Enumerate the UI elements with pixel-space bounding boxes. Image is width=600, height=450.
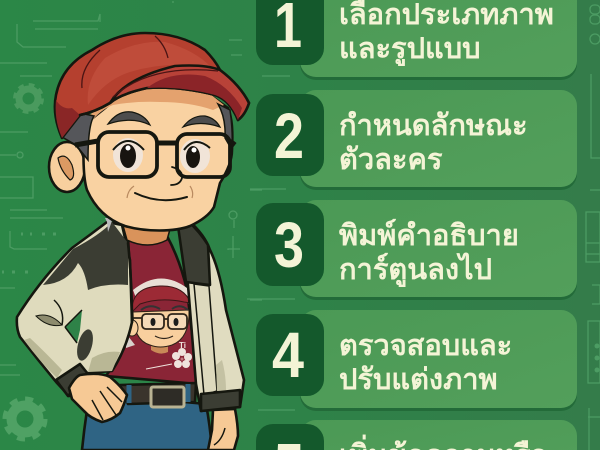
cartoon character <box>17 33 249 450</box>
mini character on shirt <box>125 278 192 369</box>
forehead shade <box>88 86 224 123</box>
card 4 <box>300 310 577 411</box>
smile creases <box>127 186 193 198</box>
right eye <box>180 139 210 173</box>
head <box>83 88 232 230</box>
right hand <box>208 409 238 450</box>
card 5 <box>300 420 577 450</box>
step 4 <box>256 310 577 411</box>
step 3 <box>256 200 577 300</box>
icon: gear top left <box>15 85 42 112</box>
nose <box>171 167 182 185</box>
cap <box>55 33 249 138</box>
jeans <box>82 396 212 450</box>
icon: gear bottom left <box>5 399 45 439</box>
badge 3 <box>256 203 324 286</box>
ear <box>49 142 85 192</box>
step 4 text: ปรับแต่งภาพ <box>339 364 498 396</box>
badge 1 <box>256 0 324 65</box>
hair <box>62 104 232 160</box>
number 3: 3 <box>274 209 304 281</box>
jacket left side and arm <box>17 218 132 396</box>
step 3 text: พิมพ์คำอธิบาย <box>339 218 519 252</box>
glasses <box>75 132 235 177</box>
shirt <box>106 236 198 384</box>
step 3 text: การ์ตูนลงไป <box>339 252 492 287</box>
left hand <box>69 374 127 422</box>
badge 5 <box>256 424 324 450</box>
number 4: 4 <box>272 319 304 391</box>
card 3 <box>300 200 577 300</box>
eyebrows <box>108 112 220 127</box>
step 5 <box>256 420 577 450</box>
step 1 text: และรูปแบบ <box>339 33 481 66</box>
step 4 text: ตรวจสอบและ <box>339 330 512 362</box>
mini character on shirt: Ti <box>179 341 186 350</box>
step 2 text: กำหนดลักษณะ <box>339 110 528 142</box>
card 1 <box>300 0 577 80</box>
badge 2 <box>256 94 324 176</box>
badge 4 <box>256 314 324 396</box>
neck <box>122 222 172 245</box>
step 1 <box>256 0 577 80</box>
left eye <box>113 138 144 172</box>
card 2 <box>300 90 577 190</box>
jacket right side <box>178 220 244 411</box>
step 2 text: ตัวละคร <box>339 144 443 176</box>
belt <box>120 383 196 407</box>
number 2: 2 <box>274 100 304 172</box>
mouth <box>135 193 187 200</box>
step 2 <box>256 90 577 190</box>
